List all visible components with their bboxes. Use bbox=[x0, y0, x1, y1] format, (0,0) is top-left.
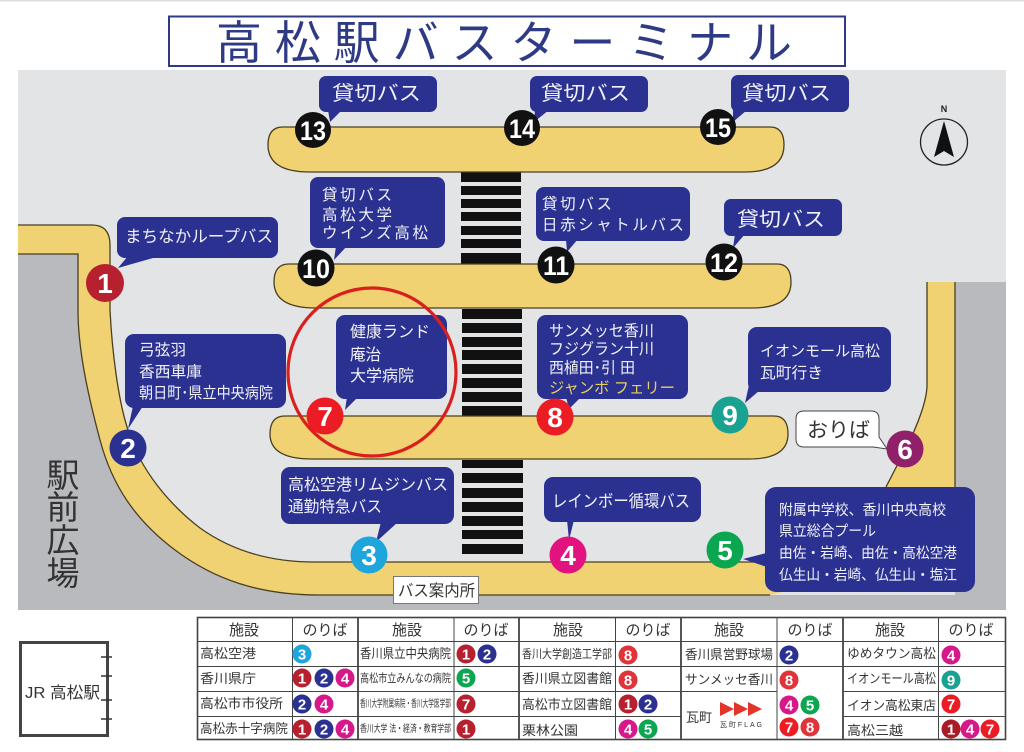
callout 7: 大学病院 bbox=[350, 367, 414, 385]
panel: terminal map bbox=[18, 70, 1006, 610]
callout 12: 貸切バス bbox=[737, 208, 825, 231]
stop 2 bbox=[110, 430, 146, 466]
stop 2: 2 bbox=[120, 433, 136, 464]
table facility names: 香川大学 法・経済・教育学部 bbox=[360, 722, 451, 735]
table facility names: 高松市立図書館 bbox=[522, 697, 612, 712]
callout 1: まちなかループバス bbox=[125, 227, 273, 246]
table stop badges: 7 bbox=[785, 720, 793, 736]
table stop badges: 4 bbox=[785, 698, 794, 714]
crosswalk: middle bbox=[462, 309, 522, 416]
table headers: 施設 bbox=[229, 622, 259, 639]
callout 2 bbox=[125, 334, 286, 429]
stop 7 bbox=[306, 398, 344, 434]
stop 3 bbox=[350, 536, 388, 574]
bus information booth bbox=[394, 576, 478, 604]
table headers bbox=[229, 622, 994, 639]
table stop badges: 5 bbox=[462, 670, 470, 688]
callout 1 bbox=[117, 217, 278, 268]
table stop badges: 2 bbox=[644, 696, 652, 714]
callout 10 bbox=[310, 177, 445, 260]
stop 7: 7 bbox=[317, 401, 333, 432]
table facility names: 香川県庁 bbox=[200, 671, 256, 686]
callout 2: 香西車庫 bbox=[139, 363, 202, 381]
callout 8: フジグラン十川 bbox=[549, 340, 654, 358]
callout 3: 高松空港リムジンバス bbox=[288, 476, 448, 494]
stop 10 bbox=[298, 250, 334, 286]
table headers: のりば bbox=[788, 622, 832, 639]
table stop badges: 5 bbox=[806, 698, 814, 714]
stop 3: 3 bbox=[361, 540, 377, 571]
callout 8: 西植田･引 田 bbox=[549, 359, 635, 377]
road: outer bus lane bbox=[18, 225, 955, 595]
table facility names: 高松市立みんなの病院 bbox=[360, 671, 451, 685]
callout 5: 県立総合プール bbox=[779, 523, 876, 540]
callout 11: 貸切バス bbox=[542, 195, 612, 213]
table headers: のりば bbox=[302, 622, 348, 639]
table facility names: 高松三越 bbox=[847, 723, 903, 738]
callout 3 bbox=[281, 467, 454, 542]
table stop badges: 2 bbox=[320, 670, 328, 688]
table facility names: サンメッセ香川 bbox=[685, 672, 773, 687]
table stop badges: 4 bbox=[624, 722, 633, 738]
table stop badges: 2 bbox=[320, 722, 328, 738]
table stop badges: 3 bbox=[298, 646, 306, 664]
callout 7 bbox=[336, 315, 447, 410]
stop 9: 9 bbox=[722, 400, 738, 431]
callout 9: 瓦町行き bbox=[760, 364, 823, 382]
facility table bbox=[197, 617, 1006, 740]
table stop badges: 7 bbox=[947, 696, 955, 714]
callout 9: イオンモール高松 bbox=[760, 343, 880, 360]
table headers: 施設 bbox=[392, 622, 422, 639]
table stop badges: 2 bbox=[785, 648, 793, 664]
callout 8: サンメッセ香川 bbox=[549, 322, 654, 340]
table facility names: ゆめタウン高松 bbox=[847, 646, 936, 661]
table facility names: 高松空港 bbox=[200, 646, 256, 661]
island: platforms 10-12 bbox=[274, 264, 791, 308]
stop 6 bbox=[886, 430, 924, 468]
table stop badges: 7 bbox=[462, 696, 470, 714]
callout 10: 貸切バス bbox=[322, 186, 392, 204]
table stop badges: 7 bbox=[986, 722, 994, 738]
callout 5: 附属中学校、香川中央高校 bbox=[779, 502, 946, 519]
crosswalk: lower bbox=[462, 460, 523, 554]
table stop badges: 8 bbox=[806, 720, 814, 736]
JR station diagram bbox=[20, 642, 112, 736]
table facility names: 香川県営野球場 bbox=[685, 647, 773, 662]
callout 4: レインボー循環バス bbox=[552, 492, 690, 511]
callout 14 bbox=[530, 76, 648, 122]
table headers: のりば bbox=[464, 622, 508, 639]
crosswalk: upper bbox=[461, 172, 521, 265]
table stop badges: 4 bbox=[341, 722, 350, 738]
table stop badges: 5 bbox=[644, 722, 652, 738]
callout 15 bbox=[731, 75, 849, 122]
callout 7: 庵治 bbox=[350, 346, 381, 364]
stop 4 bbox=[550, 536, 586, 574]
icon: Kawaramachi FLAG logo bbox=[720, 702, 762, 729]
table facility names: 栗林公園 bbox=[522, 723, 578, 738]
callout 10: ウインズ高松 bbox=[322, 224, 428, 242]
stop 1 bbox=[86, 264, 124, 302]
plaza label bbox=[46, 457, 80, 592]
highlight circle bbox=[288, 288, 456, 456]
stop 13: 13 bbox=[300, 116, 326, 146]
table stop badges: 1 bbox=[298, 670, 306, 688]
island: platforms 13-15 bbox=[268, 127, 784, 172]
stop 9 bbox=[712, 396, 748, 434]
stop 14: 14 bbox=[509, 114, 535, 144]
callout 8 bbox=[537, 315, 688, 409]
callout 2: 弓弦羽 bbox=[139, 341, 186, 359]
callout 11: 日赤シャトルバス bbox=[542, 216, 684, 234]
table stop badges: 1 bbox=[624, 696, 632, 714]
table facility names: イオンモール高松 bbox=[847, 671, 936, 686]
plaza label: 場 bbox=[46, 555, 80, 592]
callout 15: 貸切バス bbox=[742, 82, 831, 105]
stop 12: 12 bbox=[710, 248, 738, 278]
title: 高松駅バスターミナル bbox=[216, 17, 792, 69]
table stop badges: 4 bbox=[320, 696, 329, 714]
plaza label: 駅 bbox=[46, 457, 80, 494]
table stop badges: 2 bbox=[483, 646, 491, 664]
table stop badges: 4 bbox=[966, 722, 975, 738]
stop 15: 15 bbox=[705, 113, 731, 143]
table facility names: イオン高松東店 bbox=[847, 698, 936, 713]
table facility names: 瓦町 bbox=[686, 710, 712, 725]
callout 5 bbox=[743, 487, 975, 592]
stop 11 bbox=[538, 246, 574, 284]
table facility names: 香川県立中央病院 bbox=[360, 646, 451, 661]
table stop badges: 1 bbox=[298, 722, 306, 738]
table stop badges: 1 bbox=[462, 646, 470, 664]
stop 8: 8 bbox=[547, 402, 563, 433]
table facility names: 高松赤十字病院 bbox=[200, 721, 288, 736]
table stop badges: 2 bbox=[298, 696, 306, 714]
stop 1: 1 bbox=[97, 268, 113, 299]
callout 13: 貸切バス bbox=[332, 82, 421, 105]
callout 2: 朝日町･県立中央病院 bbox=[139, 384, 273, 402]
callout 11 bbox=[536, 187, 690, 252]
stop 11: 11 bbox=[543, 251, 569, 281]
table stop badges: 1 bbox=[462, 722, 470, 738]
callout 5: 由佐・岩崎、由佐・高松空港 bbox=[779, 545, 957, 562]
compass: N bbox=[941, 104, 947, 114]
stop 8 bbox=[536, 398, 574, 436]
stop 10: 10 bbox=[302, 254, 330, 284]
callout 10: 高松大学 bbox=[322, 206, 392, 224]
stop 12 bbox=[706, 244, 742, 280]
bus information booth: バス案内所 bbox=[398, 582, 475, 600]
stop 4: 4 bbox=[560, 540, 576, 571]
callout 8: ジャンボ フェリー bbox=[549, 379, 675, 397]
callout 9 bbox=[745, 327, 891, 403]
table stop badges: 8 bbox=[624, 648, 632, 664]
table headers: 施設 bbox=[714, 622, 744, 639]
stop 5: 5 bbox=[717, 535, 733, 566]
table grid bbox=[197, 617, 1006, 740]
table stop badges bbox=[292, 644, 1000, 738]
table stop badges: 8 bbox=[624, 672, 632, 690]
stop 14 bbox=[504, 110, 540, 146]
callout 3: 通勤特急バス bbox=[288, 497, 382, 516]
table facility names: 香川大学創造工学部 bbox=[522, 646, 612, 661]
callout: alighting bbox=[796, 411, 887, 449]
callout 7: 健康ランド bbox=[350, 323, 430, 341]
stop 15 bbox=[700, 109, 736, 145]
table stop badges: 8 bbox=[785, 672, 793, 690]
table headers: のりば bbox=[948, 622, 994, 639]
table facility names: 香川大学附属病院・香川大学医学部 bbox=[360, 697, 451, 710]
stop 6: 6 bbox=[897, 434, 913, 465]
callout 12 bbox=[724, 199, 842, 248]
table facility names: 高松市市役所 bbox=[200, 696, 283, 711]
compass bbox=[920, 104, 968, 165]
table stop badges: 4 bbox=[341, 670, 350, 688]
stop 5 bbox=[706, 532, 744, 568]
callout: alighting: おりば bbox=[807, 419, 870, 442]
table stop badges: 1 bbox=[947, 722, 955, 738]
table stop badges: 4 bbox=[947, 648, 956, 664]
stop 13 bbox=[295, 112, 331, 148]
callout 14: 貸切バス bbox=[541, 82, 630, 105]
stop markers bbox=[86, 109, 924, 574]
plaza label: 前 bbox=[46, 489, 80, 526]
plaza label: 広 bbox=[46, 522, 80, 559]
table headers: 施設 bbox=[875, 622, 905, 639]
table headers: のりば bbox=[626, 622, 670, 639]
JR station diagram: JR 高松駅 bbox=[25, 684, 100, 702]
table stop badges: 9 bbox=[947, 672, 955, 690]
island: platforms 7-9 bbox=[270, 416, 788, 459]
table facility names bbox=[200, 646, 936, 738]
callout 13 bbox=[319, 76, 437, 122]
table headers: 施設 bbox=[553, 622, 583, 639]
callout 5: 仏生山・岩崎、仏生山・塩江 bbox=[779, 567, 957, 584]
icon: Kawaramachi FLAG logo: 瓦町FLAG bbox=[720, 721, 762, 729]
callout 4 bbox=[544, 477, 701, 540]
table facility names: 香川県立図書館 bbox=[522, 671, 612, 686]
